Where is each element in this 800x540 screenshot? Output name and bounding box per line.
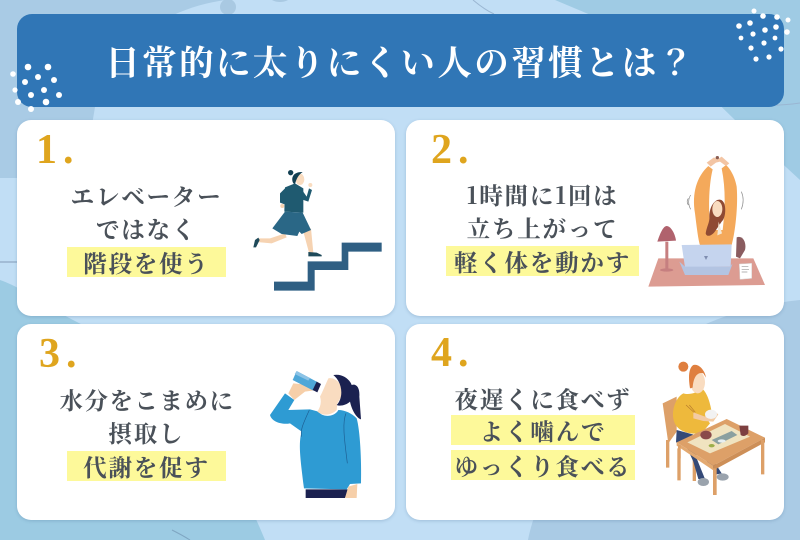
text: 水分をこまめに: 水分をこまめに [60,382,234,416]
text highlight: 階段を使う: 階段を使う [83,245,210,279]
number 2: 2. [431,127,474,173]
illustration: running up stairs [253,170,382,291]
panel: card 2 [406,120,784,316]
text: ではなく: ではなく [96,211,197,245]
title banner [17,14,784,107]
illustration: stretching at desk [648,156,765,287]
text: 立ち上がって: 立ち上がって [467,210,618,244]
text: エレベーター: エレベーター [71,178,222,212]
text: 摂取し: 摂取し [109,415,184,449]
text highlight: 代謝を促す: 代謝を促す [83,449,210,483]
number 4: 4. [431,330,474,376]
title: 日常的に太りにくい人の習慣とは？ [105,35,696,85]
number 3: 3. [39,331,82,377]
number 1: 1. [36,127,80,173]
panel: card 4 [406,324,784,520]
text highlight: ゆっくり食べる: ゆっくり食べる [455,448,631,482]
text: 夜遅くに食べず: 夜遅くに食べず [454,381,632,415]
text highlight: よく噛んで: よく噛んで [480,413,606,447]
decorative dots: left [10,64,62,112]
decorative dots: right [736,8,790,62]
text highlight: 軽く体を動かす: 軽く体を動かす [454,244,631,278]
panel: card 1 [17,120,395,316]
text highlight: よく噛んで [451,415,635,445]
text: 1時間に1回は: 1時間に1回は [466,177,618,211]
panel: card 3 [17,324,395,520]
illustration: eating at table [662,362,765,495]
illustration: woman drinking water [270,371,362,498]
